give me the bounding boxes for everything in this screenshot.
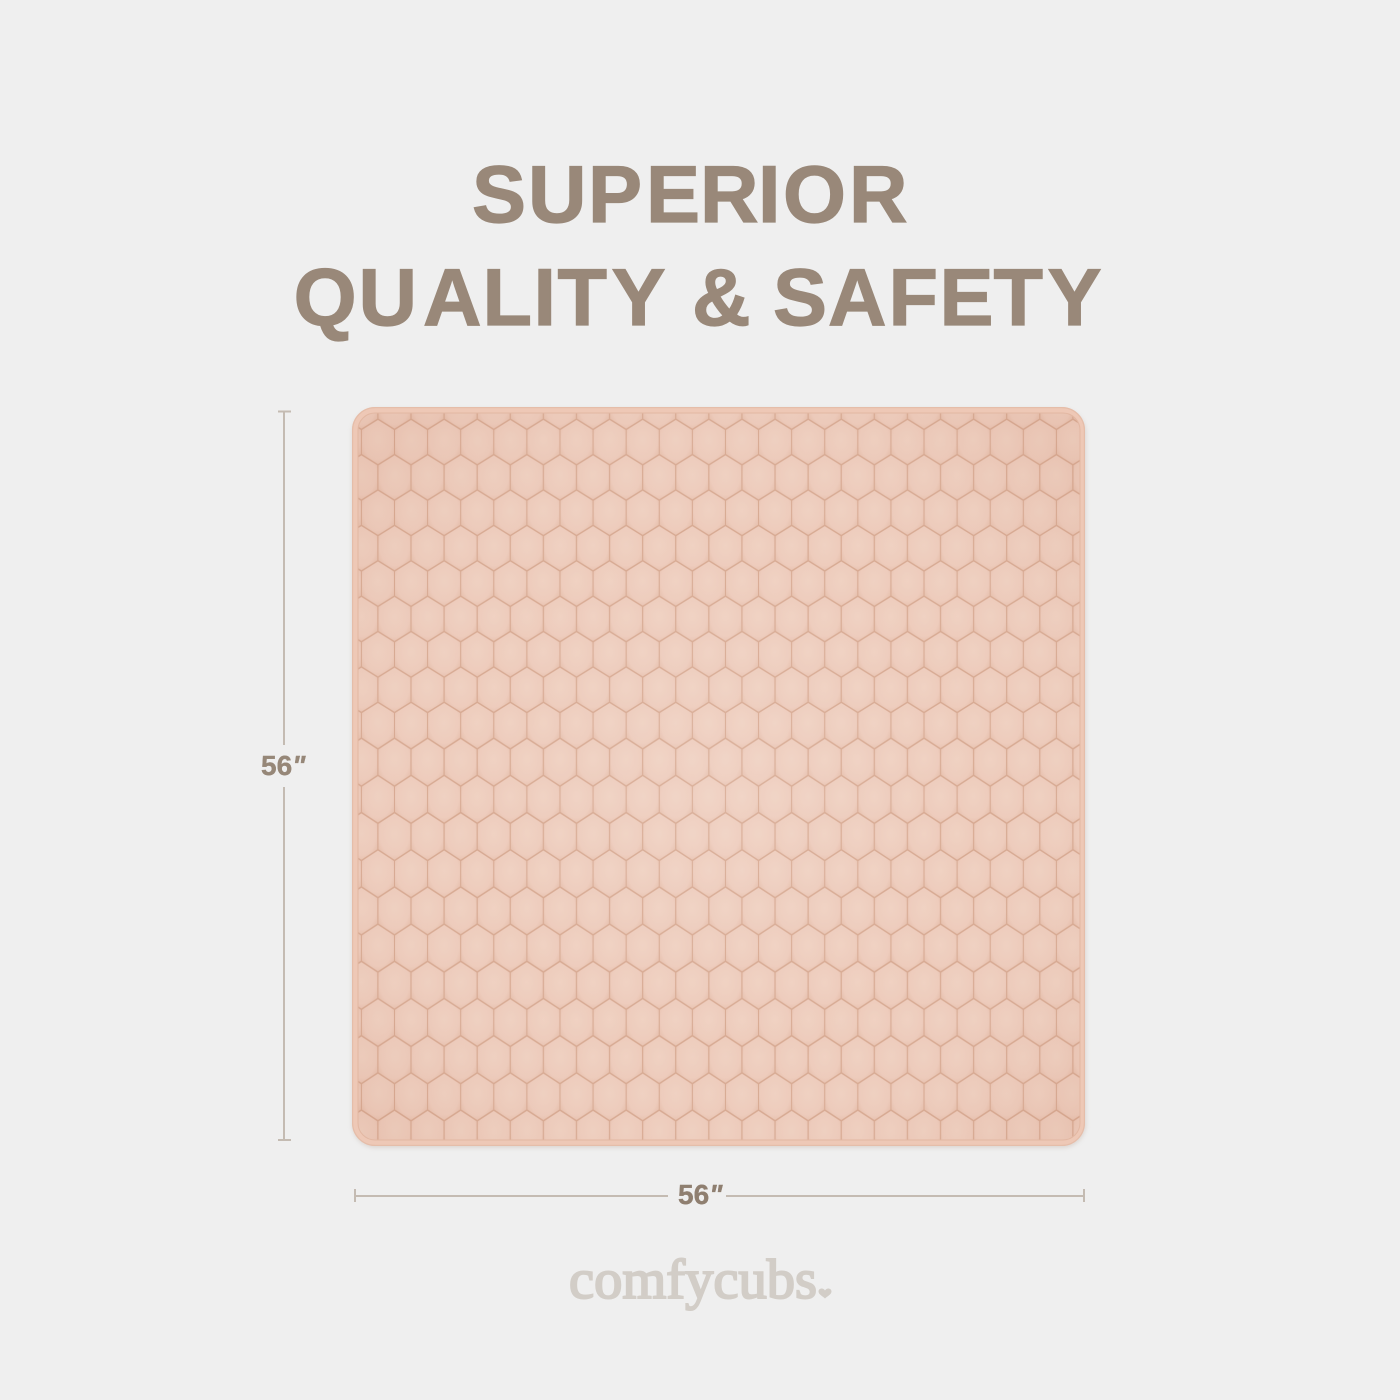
title: QUALITY & SAFETY [294, 253, 1102, 343]
icon: heart [818, 1288, 832, 1298]
width dimension line: 56" [678, 1179, 723, 1210]
height dimension line: 56" [261, 750, 306, 781]
title: SUPERIOR [472, 150, 908, 240]
title [294, 150, 1102, 343]
logo: comfycubs: comfycubs [569, 1249, 817, 1311]
quilted play mat [352, 407, 1086, 1148]
